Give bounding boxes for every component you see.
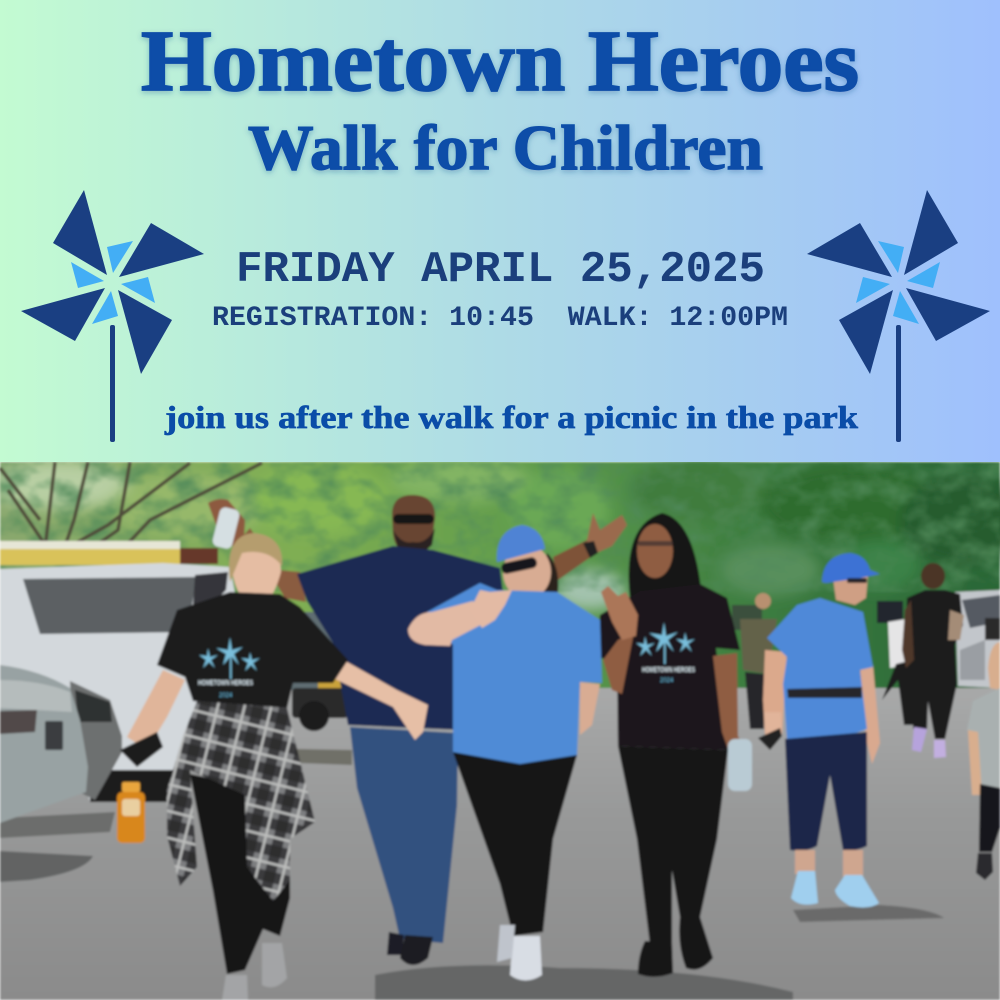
right background cars bbox=[955, 590, 1000, 688]
woman in blue shirt and cap bbox=[758, 553, 880, 907]
boy in grey shirt bbox=[967, 642, 1000, 880]
title: Hometown Heroes bbox=[141, 12, 859, 109]
icon: right pinwheel bbox=[807, 190, 990, 442]
icon: left pinwheel bbox=[21, 190, 204, 442]
date: FRIDAY APRIL 25,2025 bbox=[236, 245, 765, 295]
grey parked cars bbox=[0, 665, 122, 823]
background crowd bbox=[732, 593, 914, 729]
background woman in black bbox=[902, 563, 964, 758]
gradient banner background bbox=[0, 0, 1000, 462]
woman in plaid shirt bbox=[117, 533, 428, 1000]
photo: walkers in the park bbox=[0, 458, 1000, 1000]
shirt logo: pinwheels and event name bbox=[636, 622, 695, 684]
dark vehicle behind the man bbox=[290, 612, 352, 765]
shirt logo: plaid walker pinwheels and event name: HOMETOWN HEROES bbox=[198, 680, 253, 687]
subtitle: Walk for Children bbox=[248, 112, 763, 183]
white SUV bbox=[0, 563, 240, 802]
trees backdrop bbox=[0, 458, 1000, 697]
registration and walk times: REGISTRATION: 10:45 WALK: 12:00PM bbox=[212, 303, 788, 334]
man in navy polo bbox=[208, 495, 627, 965]
woman in black 2024 t-shirt bbox=[597, 513, 752, 977]
school bus bbox=[0, 541, 218, 565]
shirt logo: plaid walker pinwheels and event name bbox=[198, 637, 260, 699]
shirt logo: pinwheels and event name: HOMETOWN HEROES bbox=[642, 667, 695, 674]
woman in blue shirt and cap bbox=[408, 525, 602, 980]
shirt logo: plaid walker pinwheels and event name: 2024 bbox=[219, 693, 233, 699]
road bbox=[0, 688, 1000, 1000]
road shadows bbox=[0, 812, 944, 1000]
shirt logo: pinwheels and event name: 2024 bbox=[660, 678, 674, 684]
picnic invitation: join us after the walk for a picnic in the park bbox=[164, 399, 858, 435]
